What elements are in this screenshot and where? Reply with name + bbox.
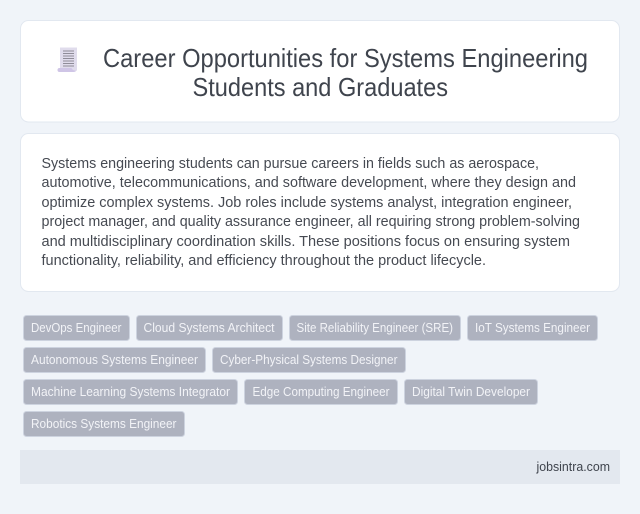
footer xyxy=(20,450,620,484)
tag: Cyber-Physical Systems Designer xyxy=(212,348,406,372)
text block: description: optimize complex systems. Job roles include systems analyst, integration engineer, xyxy=(42,195,572,211)
tag: Edge Computing Engineer: Edge Computing Engineer xyxy=(252,384,390,399)
tag: DevOps Engineer xyxy=(24,316,130,340)
tag: Robotics Systems Engineer: Robotics Systems Engineer xyxy=(31,416,177,431)
tag: Site Reliability Engineer (SRE): Site Reliability Engineer (SRE) xyxy=(296,320,453,335)
footer: jobsintra.com xyxy=(536,459,610,474)
panel: description card xyxy=(20,134,620,292)
text block: description: and multidisciplinary coordination skills. These positions focus on ensuring system xyxy=(42,234,570,250)
icon: document scroll xyxy=(58,48,77,72)
text block: description: functionality, reliability, and efficiency throughout the product lifecycle. xyxy=(42,253,486,269)
tag: Autonomous Systems Engineer: Autonomous Systems Engineer xyxy=(31,352,199,367)
tag: DevOps Engineer: DevOps Engineer xyxy=(31,320,122,335)
tag: Edge Computing Engineer xyxy=(244,380,398,404)
tag: IoT Systems Engineer: IoT Systems Engineer xyxy=(475,320,591,335)
tag: IoT Systems Engineer xyxy=(468,316,598,340)
text block: description: Systems engineering students can pursue careers in fields such as aerospace, xyxy=(42,156,539,172)
tag: Robotics Systems Engineer xyxy=(24,412,184,436)
tag: Machine Learning Systems Integrator: Machine Learning Systems Integrator xyxy=(31,384,231,399)
tag: Cloud Systems Architect: Cloud Systems Architect xyxy=(144,320,275,335)
tag: Machine Learning Systems Integrator xyxy=(24,380,238,404)
title xyxy=(103,45,588,102)
panel: header card xyxy=(20,20,620,122)
tag: Cyber-Physical Systems Designer: Cyber-Physical Systems Designer xyxy=(220,352,398,367)
title: Career Opportunities for Systems Engineering xyxy=(103,45,588,73)
tag: Cloud Systems Architect xyxy=(136,316,282,340)
title: Students and Graduates xyxy=(192,74,448,102)
tag: Digital Twin Developer: Digital Twin Developer xyxy=(412,384,531,399)
tag: Site Reliability Engineer (SRE) xyxy=(290,316,460,340)
text block: description xyxy=(42,156,580,269)
panel: job role tags xyxy=(24,316,598,436)
text block: description: automotive, telecommunications, and software development, where they design and xyxy=(42,175,576,191)
tag: Autonomous Systems Engineer xyxy=(24,348,206,372)
text block: description: project manager, and quality assurance engineer, all requiring strong problem-solving xyxy=(42,214,580,230)
tag: Digital Twin Developer xyxy=(404,380,538,404)
